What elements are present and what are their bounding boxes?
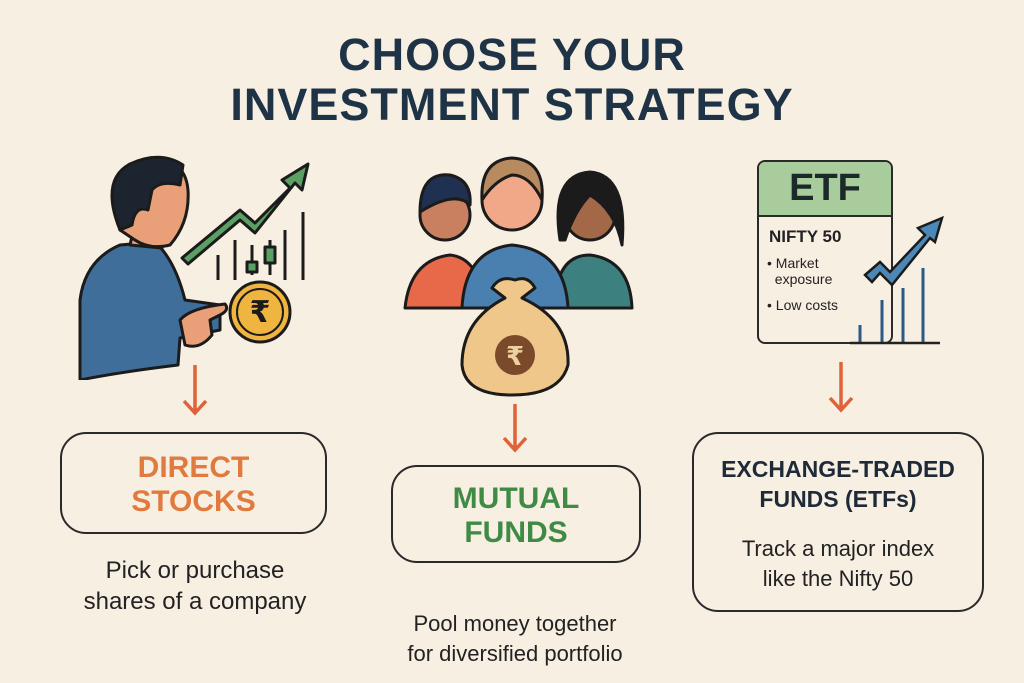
text: direct stocks description: Pick or purchase (106, 557, 284, 584)
arrow: mutual funds (502, 404, 528, 452)
icon: ETF card with chart (757, 160, 893, 344)
text: ETF description: like the Nifty 50 (763, 566, 913, 591)
box: direct stocks: DIRECT (138, 451, 249, 484)
box: direct stocks (60, 432, 327, 534)
icon: ETF card with chart: • Low costs (767, 297, 838, 313)
icon: ETF card with chart: NIFTY 50 (769, 227, 841, 246)
box: direct stocks: STOCKS (131, 485, 256, 518)
text: direct stocks description (84, 557, 306, 615)
text: ETF description: Track a major index (742, 536, 934, 561)
arrow: ETFs (828, 362, 854, 412)
box: ETFs: FUNDS (ETFs) (759, 486, 917, 512)
icon: ETF card with chart: • Market (767, 255, 819, 271)
text: mutual funds description: Pool money together (413, 611, 617, 636)
title: CHOOSE YOUR (338, 29, 686, 80)
icon: ETF card with chart: ETF (789, 167, 861, 209)
icon: man with coin and chart: ₹ (250, 296, 270, 329)
icon: man with coin and chart (78, 156, 310, 380)
text: mutual funds description: for diversified portfolio (407, 641, 623, 666)
title: INVESTMENT STRATEGY (230, 79, 794, 130)
text: mutual funds description (407, 611, 623, 666)
icon: ETF card with chart: exposure (775, 271, 832, 287)
arrow: direct stocks (182, 365, 208, 416)
text: ETF description (742, 536, 934, 591)
box: ETFs (692, 432, 984, 612)
box: mutual funds: FUNDS (464, 516, 568, 549)
icon: group with money bag (404, 156, 634, 396)
title (230, 29, 794, 130)
box: mutual funds (391, 465, 641, 563)
icon: group with money bag: ₹ (506, 341, 524, 371)
box: mutual funds: MUTUAL (453, 482, 579, 515)
text: direct stocks description: shares of a company (84, 588, 306, 615)
box: ETFs: EXCHANGE-TRADED (721, 456, 955, 482)
